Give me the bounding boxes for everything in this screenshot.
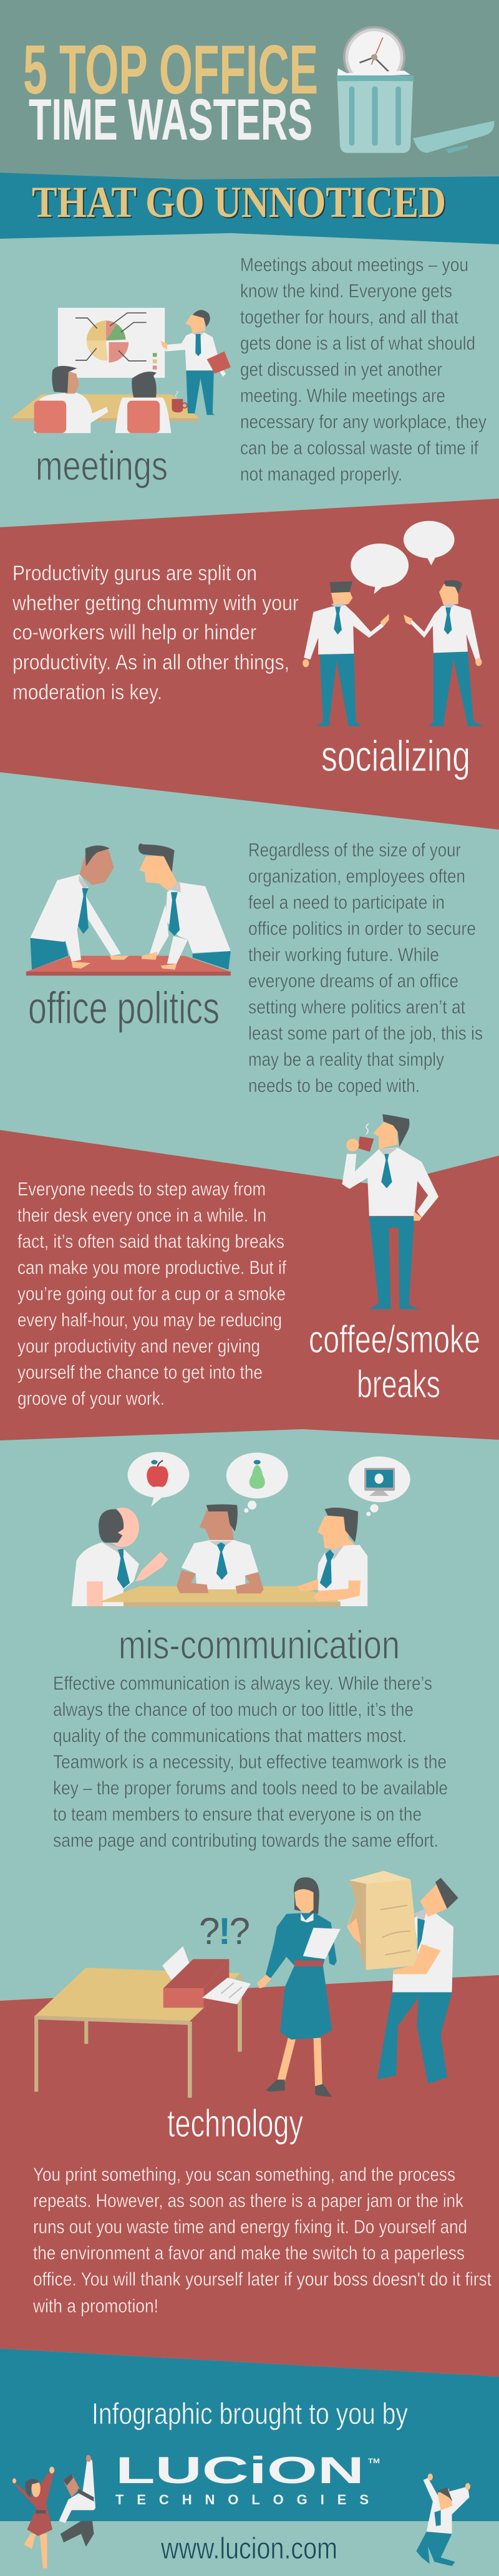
footer intro text: Infographic brought to you by <box>92 2398 408 2431</box>
illustration: arguing men <box>26 843 231 975</box>
text: coffee breaks: every half-hour, you may be reducing <box>17 1309 282 1331</box>
text: socializing: co-workers will help or hinder <box>12 621 256 644</box>
heading: meetings: meetings <box>36 443 168 489</box>
panel: technology <box>0 1871 499 2377</box>
text: mis-communication: always the chance of too much or too little, it’s the <box>53 1698 414 1720</box>
text: meetings: get discussed in yet another <box>240 358 442 380</box>
illustration: man drinking coffee <box>342 1114 438 1309</box>
text: technology <box>32 2163 492 2317</box>
text: office politics: organization, employees often <box>248 865 465 887</box>
logo: Lucion Technologies: TM <box>368 2458 380 2465</box>
icon: clock in trash can <box>337 26 494 153</box>
text: socializing: productivity. As in all other things, <box>12 651 289 674</box>
illustration: celebrating people <box>12 2455 470 2569</box>
panel: meetings <box>11 254 487 489</box>
text: coffee breaks: can make you more productive. But if <box>17 1257 286 1278</box>
text: office politics: needs to be coped with. <box>248 1075 420 1096</box>
panel: footer <box>0 2349 499 2569</box>
illustration: two men talking <box>303 521 484 726</box>
text: office politics: may be a reality that simply <box>248 1048 444 1070</box>
text: office politics: Regardless of the size of your <box>248 839 461 861</box>
heading: coffee/smoke breaks: breaks <box>357 1363 440 1406</box>
text: office politics: feel a need to participate in <box>248 891 445 913</box>
text: coffee breaks: groove of your work. <box>17 1387 165 1409</box>
text: mis-communication: to team members to ensure that everyone is on the <box>53 1803 422 1825</box>
logo: Lucion Technologies: LUCiON <box>115 2449 364 2491</box>
text: coffee breaks: Everyone needs to step away from <box>17 1178 266 1200</box>
logo: Lucion Technologies: TECHNOLOGIES <box>115 2492 369 2507</box>
text: mis-communication: quality of the communications that matters most. <box>53 1725 407 1746</box>
text: meetings: meeting. While meetings are <box>240 385 445 406</box>
panel: subtitle band <box>0 173 499 244</box>
text: mis-communication: same page and contributing towards the same effort. <box>53 1829 438 1851</box>
text: office politics: their working future. While <box>248 944 439 965</box>
text: socializing: whether getting chummy with your <box>12 591 299 615</box>
illustration: three men with thought bubbles <box>72 1452 410 1607</box>
text: coffee breaks: their desk every once in a while. In <box>17 1204 266 1226</box>
text: office politics: setting where politics aren’t at <box>248 996 465 1018</box>
text: mis-communication <box>53 1672 448 1851</box>
text: meetings <box>240 254 487 485</box>
website url: www.lucion.com <box>160 2532 337 2565</box>
heading: office politics: office politics <box>28 984 220 1033</box>
text: meetings: not managed properly. <box>240 463 402 485</box>
heading: technology: technology <box>167 2102 303 2145</box>
text: socializing: moderation is key. <box>12 681 162 704</box>
panel: socializing <box>0 499 499 830</box>
text: socializing: Productivity gurus are split on <box>12 562 257 585</box>
illustration: meeting <box>11 308 231 433</box>
panel: coffee/smoke breaks <box>0 1114 499 1440</box>
heading: mis-communication: mis-communication <box>119 1622 400 1667</box>
text: meetings: together for hours, and all that <box>240 306 458 328</box>
text: meetings: know the kind. Everyone gets <box>240 280 452 302</box>
text: coffee breaks: you’re going out for a cup or a smoke <box>17 1283 286 1305</box>
text: technology: with a promotion! <box>32 2295 158 2317</box>
text: mis-communication: Effective communication is always key. While there’s <box>53 1672 432 1694</box>
text: office politics: everyone dreams of an office <box>248 970 458 992</box>
text: coffee breaks <box>17 1178 286 1409</box>
illustration: printer jam and office workers <box>34 1871 458 2098</box>
text: coffee breaks: yourself the chance to get into the <box>17 1361 263 1383</box>
text: office politics <box>248 839 483 1096</box>
text: socializing <box>12 562 299 704</box>
panel: mis-communication <box>53 1452 448 1851</box>
icon: question and exclamation marks: ?!? <box>199 1910 250 1952</box>
text: coffee breaks: your productivity and never giving <box>17 1335 260 1357</box>
title line 1: 5 TOP OFFICE <box>23 31 318 108</box>
title line 2: TIME WASTERS <box>29 87 312 152</box>
panel: header <box>0 0 499 181</box>
logo: Lucion Technologies <box>115 2449 380 2507</box>
panel: office politics <box>26 839 483 1096</box>
heading: coffee/smoke breaks <box>309 1318 480 1406</box>
text: coffee breaks: fact, it’s often said that taking breaks <box>17 1230 284 1252</box>
